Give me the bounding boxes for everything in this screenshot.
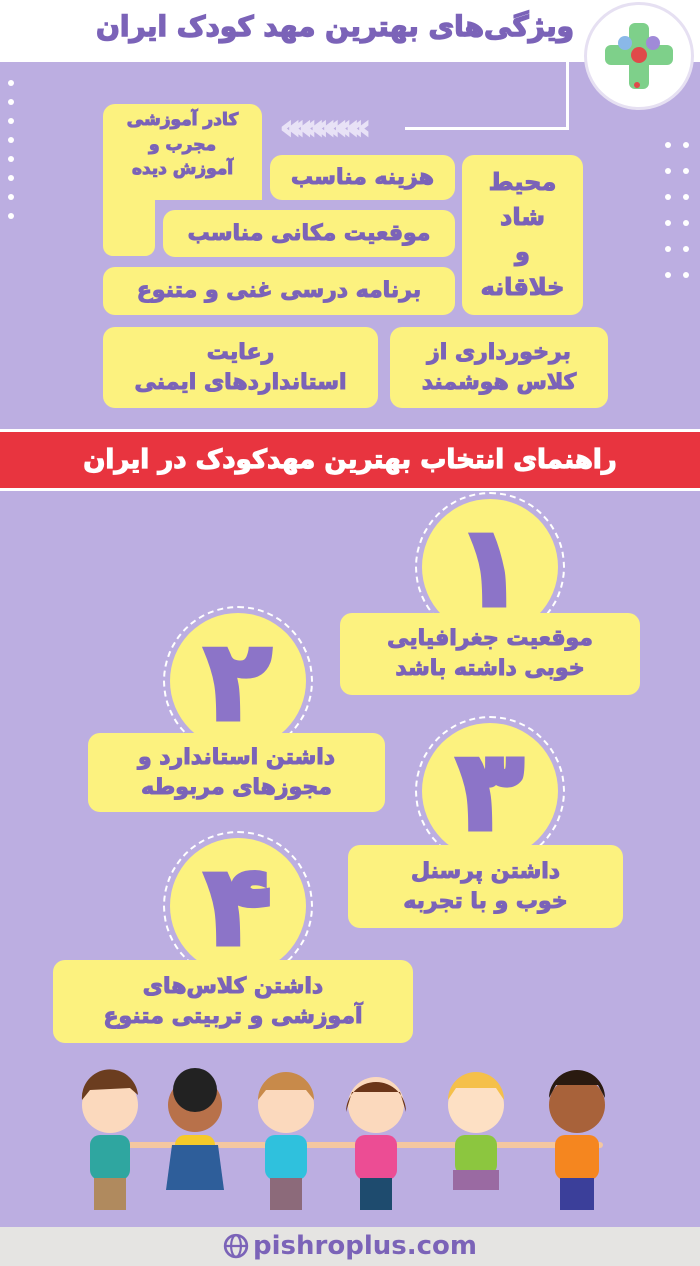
step 4: آموزشی و تربیتی متنوع: [104, 1004, 362, 1028]
feature: environment: و: [515, 238, 530, 266]
connector line: [405, 62, 569, 130]
red banner: [0, 429, 700, 491]
right dots: [665, 142, 689, 278]
feature: smart class: [390, 327, 608, 408]
footer: [0, 1227, 700, 1266]
feature: curriculum: برنامه درسی غنی و متنوع: [137, 278, 421, 303]
feature: location: موقعیت مکانی مناسب: [188, 221, 430, 246]
illustration: kids holding hands: [82, 1068, 605, 1210]
feature: cost: هزینه مناسب: [291, 165, 434, 190]
left dots: [8, 80, 14, 219]
feature: location: [163, 210, 455, 257]
feature: environment: [462, 155, 583, 315]
step 1: موقعیت جغرافیایی: [387, 626, 593, 651]
feature: staff: آموزش دیده: [132, 159, 233, 179]
footer url: pishroplus.com: [253, 1231, 477, 1261]
feature: safety: استانداردهای ایمنی: [134, 370, 347, 394]
feature: curriculum: [103, 267, 455, 315]
feature: environment: خلاقانه: [481, 273, 564, 301]
step 4: داشتن کلاس‌های: [143, 974, 323, 999]
step 4: ۴: [204, 842, 272, 970]
step 2: داشتن استاندارد و: [138, 745, 335, 770]
step 3: خوب و با تجربه: [403, 888, 568, 914]
step 2: [88, 606, 385, 812]
feature: staff: [103, 104, 262, 256]
feature: smart class: برخورداری از: [427, 340, 571, 365]
feature: smart class: کلاس هوشمند: [422, 370, 576, 394]
step 1: خوبی داشته باشد: [395, 656, 585, 681]
feature: environment: شاد: [500, 203, 545, 231]
step 4: [53, 831, 413, 1043]
header bar: [0, 0, 700, 62]
feature: safety: [103, 327, 378, 408]
step 3: داشتن پرسنل: [411, 859, 560, 884]
feature: staff: مجرب و: [149, 135, 216, 155]
step 2: ۲: [204, 617, 272, 745]
chevrons: «««««««: [280, 108, 362, 146]
feature: environment: محیط: [489, 168, 556, 196]
red banner: راهنمای انتخاب بهترین مهدکودک در ایران: [83, 445, 617, 475]
step 3: [348, 716, 623, 928]
logo: [584, 2, 694, 110]
feature: cost: [270, 155, 455, 200]
feature: staff: کادر آموزشی: [127, 110, 238, 130]
feature: safety: رعایت: [207, 340, 274, 365]
step 1: [340, 492, 640, 695]
step 3: ۳: [456, 727, 524, 855]
title: ویژگی‌های بهترین مهد کودک ایران: [96, 10, 574, 43]
step 1: ۱: [456, 503, 524, 631]
step 2: مجوزهای مربوطه: [141, 774, 332, 800]
